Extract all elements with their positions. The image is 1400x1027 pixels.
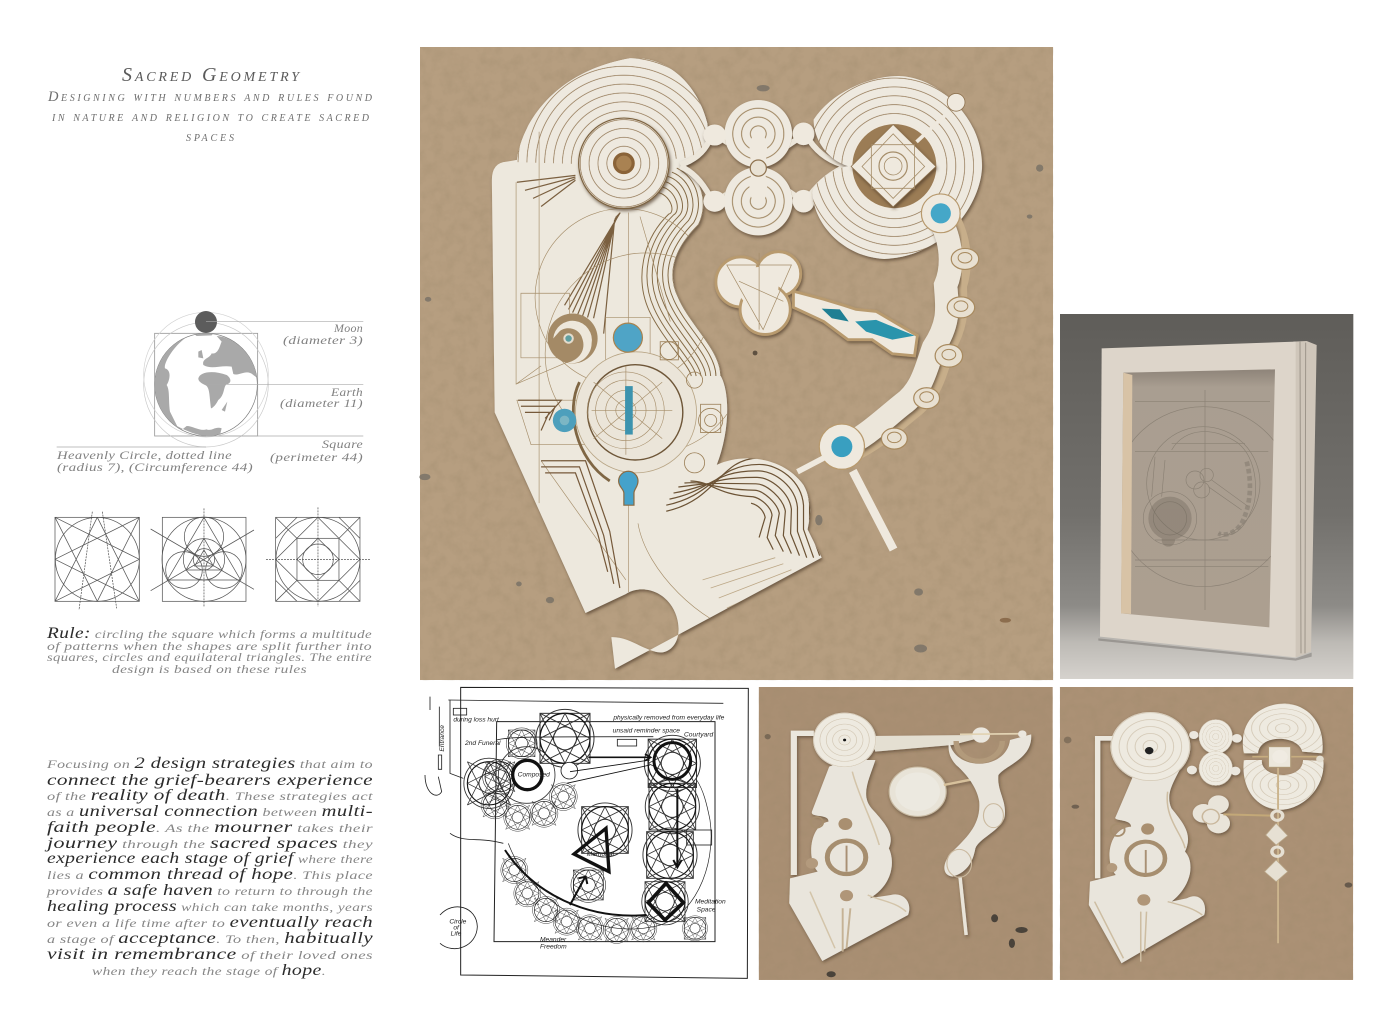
book photo: layered paper frame xyxy=(1060,314,1353,679)
large right ring disc with diamond xyxy=(812,76,982,259)
design strategies paragraph: healing process which can take months, years xyxy=(47,898,373,915)
handwritten annotations: Space xyxy=(697,907,716,914)
diagram labels: Heavenly Circle, dotted line xyxy=(56,448,232,462)
connector flower xyxy=(680,100,847,236)
fan lines xyxy=(517,175,620,334)
diagram labels: Square xyxy=(322,437,363,451)
turquoise pools xyxy=(553,323,642,505)
subtitle: spaces xyxy=(186,129,234,145)
diagram labels xyxy=(56,321,363,474)
photo background xyxy=(419,47,1053,680)
handwritten annotations: Meditation xyxy=(695,898,726,905)
rule text block xyxy=(46,625,372,676)
design strategies paragraph: as a universal connection between multi- xyxy=(47,803,373,820)
handwritten annotations: Entrance xyxy=(439,725,446,752)
handwritten annotations: Courtyard xyxy=(684,732,714,739)
diamond xyxy=(851,125,936,207)
title block xyxy=(47,64,373,145)
main photo: laser cut paper model on textured card xyxy=(419,47,1053,680)
cut paper body xyxy=(789,713,1031,961)
hand drawn plan sketch xyxy=(425,687,748,978)
path of nodes with bumps xyxy=(797,194,979,550)
clover key with turquoise water xyxy=(716,252,917,356)
subtitle: in nature and religion to create sacred xyxy=(51,109,370,125)
lower left stepped lines xyxy=(518,400,620,588)
design strategies paragraph: lies a common thread of hope . This place xyxy=(47,866,374,883)
title: Sacred Geometry xyxy=(122,64,301,86)
paper model: left body xyxy=(492,47,822,669)
wavy contour bands xyxy=(642,166,721,376)
thick highlighted route xyxy=(505,743,691,920)
geometry circles xyxy=(464,709,708,944)
rule text block: Rule: circling the square which forms a multitude xyxy=(46,625,372,642)
stick xyxy=(853,471,894,550)
diagram labels: Earth xyxy=(330,385,363,399)
photo background xyxy=(1060,687,1353,980)
handwritten annotations: Life xyxy=(451,930,462,937)
three circling-the-square pattern diagrams xyxy=(55,507,370,610)
faint etched drawing xyxy=(1131,390,1274,610)
cut paper body xyxy=(1089,703,1324,963)
design strategies paragraph: experience each stage of grief where there xyxy=(47,850,373,867)
top finial and rod xyxy=(917,116,945,142)
design strategies paragraph: faith people . As the mourner takes their xyxy=(47,819,373,836)
turquoise slot xyxy=(625,386,633,435)
diagram labels: (diameter 11) xyxy=(280,396,363,410)
central ring court xyxy=(573,352,697,481)
handwritten annotations: of xyxy=(453,924,460,931)
raised central disc with hole xyxy=(579,118,669,208)
top ring lines xyxy=(512,58,708,164)
handwritten annotations: during loss hurt xyxy=(453,717,500,724)
pattern: triangles and circles xyxy=(151,508,254,607)
diagram labels: Moon xyxy=(333,321,363,335)
handwritten annotations: Circle xyxy=(449,918,467,925)
handwritten annotations: Composed xyxy=(518,772,550,779)
pattern: nested squares and diamonds xyxy=(266,507,370,607)
design strategies paragraph: provides a safe haven to return to through the xyxy=(46,882,373,899)
handwritten annotations: unsaid reminder space xyxy=(613,728,680,735)
backdrop xyxy=(1060,314,1353,679)
handwritten annotations: Meander xyxy=(540,937,567,944)
rule text block: of patterns when the shapes are split further into xyxy=(47,639,372,653)
handwritten annotations xyxy=(439,714,726,950)
pattern: eight point star xyxy=(55,512,139,610)
earth with continents xyxy=(57,311,363,447)
book front frame xyxy=(1100,342,1296,657)
site rotation notes and arrows xyxy=(425,697,712,949)
bottom sweep contour lines xyxy=(666,458,820,558)
handwritten annotations: 2nd Funeral xyxy=(464,740,501,747)
design strategies paragraph: journey through the sacred spaces they xyxy=(44,835,374,852)
design strategies paragraph: or even a life time after to eventually reach xyxy=(47,914,373,931)
design strategies paragraph: Focusing on 2 design strategies that aim to xyxy=(46,755,373,772)
photo: second model iteration xyxy=(1060,687,1353,980)
rule text block: design is based on these rules xyxy=(112,662,307,676)
handwritten annotations: physically removed from everyday life xyxy=(612,714,725,721)
rule text block: squares, circles and equilateral triangles. The entire xyxy=(47,650,372,664)
model details xyxy=(1095,747,1324,962)
design strategies paragraph: connect the grief-bearers experience xyxy=(47,772,373,789)
right side ornament panels xyxy=(660,342,723,473)
handwritten annotations: Freedom xyxy=(540,943,567,950)
diagram labels: (perimeter 44) xyxy=(270,450,363,464)
diagram labels: (radius 7), (Circumference 44) xyxy=(57,460,253,474)
design strategies paragraph: when they reach the stage of hope . xyxy=(92,962,326,979)
design strategies paragraph: of the reality of death . These strategies act xyxy=(47,787,373,804)
subtitle xyxy=(47,89,373,145)
recessed window xyxy=(1121,369,1275,628)
photo background xyxy=(759,687,1053,980)
subtitle: Designing with numbers and rules found xyxy=(47,89,373,105)
body details xyxy=(806,727,1027,952)
design strategies paragraph xyxy=(44,755,374,979)
handwritten annotations: Memorial xyxy=(587,851,615,858)
diagram labels: (diameter 3) xyxy=(283,333,363,347)
book pages xyxy=(1293,341,1317,657)
spiral recess xyxy=(548,313,598,364)
sheet xyxy=(448,687,748,978)
moon xyxy=(195,311,217,333)
design strategies paragraph: a stage of acceptance . To then, habitually xyxy=(47,930,373,947)
photo: first model iteration xyxy=(759,687,1053,980)
design strategies paragraph: visit in remembrance of their loved ones xyxy=(47,946,373,963)
earth and moon geometry diagram xyxy=(56,311,363,474)
faint construction lines xyxy=(516,132,727,618)
